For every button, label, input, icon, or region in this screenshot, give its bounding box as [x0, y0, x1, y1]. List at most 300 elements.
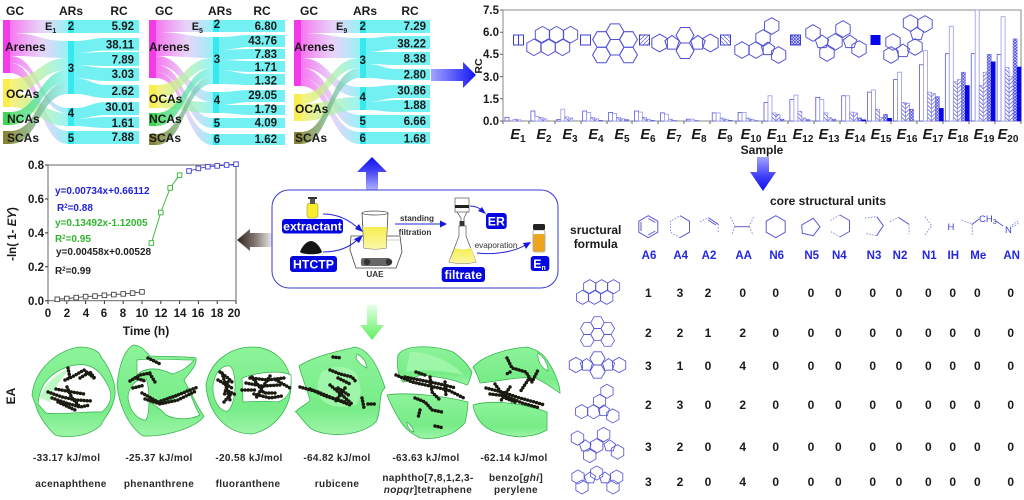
- label: En: n: [541, 265, 546, 272]
- x axis sample labels: E: [871, 127, 880, 143]
- unit names: A4: [673, 250, 689, 262]
- energies and compound names: perylene: [494, 485, 538, 496]
- x axis sample labels: E: [897, 127, 906, 143]
- rows E9: [366, 20, 430, 144]
- row 3 values: 3: [645, 359, 652, 373]
- labels E5: Arenes: [149, 40, 190, 54]
- y axis labels: 4.5: [483, 49, 500, 61]
- flows E9: [301, 20, 360, 144]
- labels E5: 43.76: [248, 36, 277, 48]
- x axis sample labels: E: [510, 127, 520, 143]
- unit names: N3: [867, 250, 881, 262]
- x axis sample labels: E: [948, 127, 957, 143]
- energies and compound names: -33.17 kJ/mol: [33, 453, 100, 464]
- row 5 values: 0: [772, 440, 779, 454]
- x axis sample labels: E: [536, 127, 546, 143]
- molecule: [218, 372, 236, 402]
- energies and compound names: benzo[ghi]: [489, 473, 543, 484]
- labels E1: OCAs: [6, 87, 40, 101]
- x axis sample labels: E: [640, 127, 650, 143]
- x axis sample labels: E: [819, 127, 828, 143]
- fit equations: =0.95: [66, 234, 91, 245]
- row 2 values: 2: [739, 326, 746, 340]
- energies and compound names: -20.58 kJ/mol: [215, 453, 283, 464]
- sankey panel: E1: [3, 4, 139, 145]
- row 5 values: 0: [974, 440, 981, 454]
- labels E1: 7.88: [112, 132, 135, 144]
- row 1 values: 0: [974, 286, 981, 300]
- label: HTCTP: HTCTP: [293, 258, 334, 272]
- row 2 values: 0: [772, 326, 779, 340]
- axis titles: [7, 207, 169, 338]
- row 4 values: 0: [705, 398, 712, 412]
- labels E5: 6: [214, 134, 220, 146]
- icon: HTCTP powder: [300, 241, 322, 254]
- x axis sample labels: 9: [727, 134, 733, 145]
- molecule: [300, 357, 375, 408]
- labels E1: 2: [68, 21, 74, 33]
- axis titles: Time (h): [123, 324, 169, 338]
- line chart: kinetics: [7, 160, 240, 338]
- row 2 values: 0: [925, 326, 932, 340]
- x axis sample labels: 6: [650, 134, 656, 145]
- row 3 values: 4: [739, 359, 746, 373]
- nodes E5: [213, 20, 219, 145]
- row 2 values: 0: [1007, 326, 1014, 340]
- labels E5: 1.71: [255, 62, 278, 74]
- x axis labels: 14: [174, 308, 187, 320]
- labels E9: 5: [359, 116, 366, 128]
- x axis labels: 20: [228, 308, 240, 320]
- x axis labels: 16: [192, 308, 204, 320]
- flows E5: [156, 20, 213, 145]
- energies and compound names: fluoranthene: [216, 479, 280, 490]
- labels E1: Arenes: [5, 40, 46, 54]
- fit equations: y=0.13492x-1.12005: [55, 218, 148, 229]
- row 1 values: 0: [925, 286, 932, 300]
- row 1 values: 0: [772, 286, 779, 300]
- row 2 values: 1: [705, 326, 712, 340]
- row 6 values: 0: [835, 475, 842, 489]
- x axis sample labels: 19: [983, 134, 995, 145]
- x axis sample labels: 15: [880, 134, 892, 145]
- row 3 values: 0: [869, 359, 876, 373]
- unit names: IH: [948, 250, 959, 262]
- molecule column: [569, 280, 626, 494]
- row 2 values: 0: [835, 326, 842, 340]
- x axis sample labels: 7: [676, 134, 682, 145]
- row 4 values: 3: [677, 398, 684, 412]
- row 5 values: 0: [869, 440, 876, 454]
- group bars E9: [294, 20, 301, 144]
- x axis sample labels: E: [614, 127, 624, 143]
- x axis sample labels: 1: [520, 134, 526, 145]
- series black: [55, 290, 144, 302]
- labels E9: E: [336, 21, 343, 33]
- x axis sample labels: 8: [701, 134, 707, 145]
- arrow: process to bar chart and sankey: [357, 157, 387, 190]
- unit icons: H: [948, 222, 954, 233]
- row 4 values: 2: [645, 398, 652, 412]
- energies and compound names: acenaphthene: [35, 479, 107, 490]
- fit equations: R: [55, 266, 62, 277]
- row 6 values: 0: [705, 475, 712, 489]
- labels E1: 3.03: [112, 69, 134, 81]
- row 5 values: 3: [645, 440, 652, 454]
- labels E1: SCAs: [7, 131, 39, 145]
- energies and compound names: rubicene: [315, 479, 359, 490]
- row 5 values: 0: [949, 440, 956, 454]
- chart frame: [45, 165, 236, 304]
- x axis sample labels: 10: [750, 134, 762, 145]
- row 2 values: 0: [949, 326, 956, 340]
- labels E1: 2.62: [112, 86, 134, 98]
- x axis sample labels: 17: [932, 134, 944, 145]
- row heading: formula: [574, 237, 618, 251]
- y axis labels: 0.0: [483, 116, 499, 128]
- labels E5: 6.80: [255, 21, 277, 33]
- labels E5: 29.05: [248, 90, 278, 102]
- cage: benzo ghi perylene: [473, 347, 560, 437]
- cage: phenanthrene: [117, 345, 204, 436]
- y axis labels: 0.2: [28, 262, 44, 274]
- x axis sample labels: 13: [828, 134, 840, 145]
- unit icons: N: [1005, 225, 1012, 236]
- icon: funnel and flask: [449, 198, 476, 264]
- unit icons: CH: [979, 214, 993, 225]
- row heading: [570, 223, 621, 251]
- row 4 values: 0: [772, 398, 779, 412]
- row 5 values: 2: [677, 440, 684, 454]
- labels E1: 3: [68, 63, 74, 75]
- labels E1: 38.11: [106, 40, 135, 52]
- fit equations: 2: [64, 204, 68, 210]
- x axis sample labels: 18: [957, 134, 969, 145]
- labels E1: 30.01: [105, 102, 135, 114]
- labels E9: 8.38: [404, 53, 427, 65]
- row 2 values: [645, 326, 1014, 340]
- row 1 values: 1: [645, 286, 652, 300]
- row 4 values: 0: [1007, 398, 1014, 412]
- labels E9: SCAs: [295, 131, 327, 145]
- labels E9: 1.68: [404, 133, 427, 145]
- labels E5: NCAs: [149, 112, 182, 126]
- x axis sample labels: E: [741, 127, 750, 143]
- x axis labels: 12: [155, 308, 167, 320]
- row 1 values: 0: [1007, 286, 1014, 300]
- labels E9: 2: [359, 21, 366, 33]
- cage: naphtho tetraphene: [387, 347, 472, 439]
- x axis sample labels: 4: [598, 134, 604, 145]
- labels E5: 1.32: [255, 76, 277, 88]
- row 4 values: 2: [739, 398, 746, 412]
- row 1 values: 0: [869, 286, 876, 300]
- label: evaporation: evaporation: [475, 241, 518, 250]
- energies and compound names: nopqr]tetraphene: [384, 485, 472, 496]
- labels E1: E: [45, 21, 52, 33]
- labels E5: 5: [199, 28, 203, 35]
- y axis labels: 0.6: [28, 194, 44, 206]
- chart frame: [500, 10, 1021, 124]
- label: En: E: [533, 257, 541, 271]
- energies and compound names: -63.63 kJ/mol: [392, 453, 460, 464]
- x axis labels: 8: [120, 308, 127, 320]
- x axis sample labels: 12: [802, 134, 814, 145]
- x axis sample labels: E: [923, 127, 932, 143]
- row 3 values: 0: [705, 359, 712, 373]
- row 4 values: 0: [869, 398, 876, 412]
- row heading: sructural: [570, 223, 621, 237]
- fit equations: y=0.00458x+0.00528: [56, 247, 152, 258]
- panel: extraction process: [272, 190, 558, 288]
- row 3 values: 0: [772, 359, 779, 373]
- cage: acenaphthene: [32, 347, 115, 437]
- row 1 values: 0: [739, 286, 746, 300]
- y axis labels: 7.5: [483, 5, 500, 17]
- legend: molecules with swatches: [514, 15, 932, 63]
- nodes E1: [68, 20, 74, 144]
- arrow: sankey to bar chart: [431, 62, 476, 88]
- fit equations: 2: [62, 267, 66, 273]
- fit equations: [55, 186, 152, 277]
- arrow: evaporation to vial: [477, 242, 531, 254]
- arrow: bar chart to table: [750, 157, 776, 191]
- x axis sample labels: 3: [572, 134, 578, 145]
- y axis title: RC: [473, 58, 485, 74]
- row 5 values: 4: [739, 440, 746, 454]
- fit equations: R: [55, 234, 62, 245]
- unit names: N2: [893, 250, 907, 262]
- y axis labels: 0.8: [28, 160, 45, 172]
- molecule: [486, 358, 545, 408]
- labels E5: 1.62: [255, 134, 277, 146]
- x axis sample labels: 11: [777, 134, 788, 145]
- row 5 values: 0: [835, 440, 842, 454]
- cage: rubicene: [295, 347, 385, 435]
- row 3 values: 0: [835, 359, 842, 373]
- row 3 values: 0: [925, 359, 932, 373]
- y axis labels: 0.4: [28, 228, 45, 240]
- x axis sample labels: E: [588, 127, 598, 143]
- row 3 values: 0: [974, 359, 981, 373]
- row 1 values: 2: [705, 286, 712, 300]
- nodes E9: [360, 20, 366, 144]
- x axis labels: 6: [101, 308, 107, 320]
- x axis labels: 18: [211, 308, 224, 320]
- labels E5: ARs: [208, 4, 232, 18]
- unit names: N6: [769, 250, 784, 262]
- labels E5: E: [192, 21, 199, 33]
- row 6 values: 0: [925, 475, 932, 489]
- table heading: core structural units: [770, 194, 886, 208]
- row 6 values: 0: [974, 475, 981, 489]
- x axis sample labels: E: [845, 127, 854, 143]
- row 6 values: 0: [772, 475, 779, 489]
- x axis sample labels: E: [793, 127, 802, 143]
- x axis sample labels: E: [562, 127, 572, 143]
- row 3 values: 0: [949, 359, 956, 373]
- row 3 values: [645, 359, 1014, 373]
- group bars E1: [3, 20, 10, 144]
- rows E5: [219, 20, 285, 145]
- row 2 values: 0: [896, 326, 903, 340]
- row 3 values: 0: [896, 359, 903, 373]
- energies and compound names: naphtho[7,8,1,2,3-: [382, 473, 474, 484]
- icon: hot plate: [350, 236, 402, 268]
- x axis labels: 0: [45, 308, 51, 320]
- unit names: N1: [922, 250, 937, 262]
- labels E9: 1.88: [404, 100, 427, 112]
- labels E9: GC: [300, 4, 318, 18]
- unit names: N4: [832, 250, 847, 262]
- unit icons: [639, 214, 1019, 238]
- labels E5: 7.83: [255, 49, 277, 61]
- x axis labels: 2: [64, 308, 70, 320]
- labels E1: [5, 4, 135, 145]
- unit names: Me: [970, 250, 986, 262]
- labels E5: 5: [214, 118, 221, 130]
- row 6 values: 0: [1007, 475, 1014, 489]
- labels E9: [294, 4, 427, 145]
- row 2 values: 0: [808, 326, 815, 340]
- arrow: process to line chart: [237, 229, 272, 251]
- row 6 values: 0: [949, 475, 956, 489]
- fit equations: R: [57, 203, 64, 214]
- row 6 values: [645, 475, 1014, 489]
- x axis sample labels: E: [998, 127, 1007, 143]
- labels E9: 2.80: [404, 69, 426, 81]
- row 2 values: 2: [645, 326, 652, 340]
- y axis labels: 6.0: [483, 27, 499, 39]
- row 6 values: 4: [739, 475, 746, 489]
- row 2 values: 0: [869, 326, 876, 340]
- y axis labels: 0.0: [28, 296, 44, 308]
- row 5 values: 0: [1007, 440, 1014, 454]
- panel border: [272, 190, 558, 288]
- labels E5: SCAs: [149, 131, 181, 145]
- x axis sample labels: E: [691, 127, 701, 143]
- row 6 values: 3: [645, 475, 652, 489]
- unit icons: 3: [993, 219, 997, 226]
- row label: EA: EA: [4, 387, 18, 404]
- row 4 values: [645, 398, 1014, 412]
- axis titles: -ln( 1- EY): [7, 207, 19, 261]
- x axis sample labels: 16: [906, 134, 918, 145]
- unit names: N5: [804, 250, 820, 262]
- energies and compound names: -64.82 kJ/mol: [303, 453, 371, 464]
- labels E9: 38.22: [397, 38, 426, 50]
- labels E1: NCAs: [7, 112, 40, 126]
- labels E5: GC: [155, 4, 173, 18]
- x axis sample labels: E: [767, 127, 777, 143]
- rows E1: [74, 20, 139, 144]
- flows E1: [10, 20, 68, 144]
- row 4 values: 0: [974, 398, 981, 412]
- row 4 values: 0: [949, 398, 956, 412]
- labels E1: 5: [68, 133, 75, 145]
- label: ER: ER: [488, 214, 505, 228]
- arrow: funnel to ER: [470, 206, 486, 214]
- x axis labels: 4: [83, 308, 90, 320]
- fit equations: y=0.00734x+0.66112: [55, 186, 150, 197]
- x axis sample labels: E: [974, 127, 983, 143]
- row 5 values: [645, 440, 1014, 454]
- bars: [505, 10, 1021, 121]
- fit equations: =0.99: [66, 266, 91, 277]
- row 5 values: 0: [896, 440, 903, 454]
- labels E9: 6: [359, 133, 366, 145]
- arrow: process to EA: [360, 305, 384, 340]
- group bars E5: [149, 20, 156, 145]
- row 6 values: 2: [677, 475, 684, 489]
- sankey panel: E9: [294, 4, 430, 145]
- molecule: [396, 372, 464, 428]
- labels E9: 4: [359, 92, 366, 104]
- labels E9: 6.66: [404, 116, 426, 128]
- sankey panel: E5: [149, 4, 285, 146]
- label: standing: standing: [400, 214, 434, 223]
- labels E5: 3: [214, 54, 220, 66]
- row 4 values: 0: [896, 398, 903, 412]
- row 1 values: 0: [896, 286, 903, 300]
- energies and compound names: -62.14 kJ/mol: [480, 453, 548, 464]
- labels E5: RC: [253, 4, 271, 18]
- x axis labels: [45, 308, 240, 320]
- labels E1: 5.92: [112, 21, 134, 33]
- arrow: standing filtration: [395, 220, 447, 228]
- labels E5: 1.79: [255, 104, 277, 116]
- x axis sample labels: E: [717, 127, 727, 143]
- labels E1: RC: [110, 4, 128, 18]
- labels E1: 1.61: [112, 118, 135, 130]
- x axis title: Sample: [741, 143, 784, 157]
- row 3 values: 0: [808, 359, 815, 373]
- molecule: [130, 358, 198, 404]
- labels E9: ARs: [353, 4, 377, 18]
- x axis sample labels: 5: [624, 134, 630, 145]
- label: filtrate: filtrate: [445, 268, 482, 282]
- labels E5: OCAs: [149, 92, 183, 106]
- row 4 values: 0: [835, 398, 842, 412]
- fit equations: 2: [62, 235, 66, 241]
- row 6 values: 0: [808, 475, 815, 489]
- arrow: powder to beaker: [323, 235, 363, 252]
- series green: [149, 173, 182, 245]
- unit names: AA: [735, 250, 752, 262]
- row 2 values: 2: [677, 326, 684, 340]
- icon: vial: [533, 224, 545, 252]
- energies and compound names: -25.37 kJ/mol: [125, 453, 193, 464]
- label: filtration: filtration: [399, 228, 431, 237]
- labels E5: 2: [214, 19, 220, 31]
- labels E1: GC: [6, 4, 24, 18]
- unit names: AN: [1003, 250, 1020, 262]
- row 5 values: 0: [925, 440, 932, 454]
- energies and compound names: phenanthrene: [124, 479, 194, 490]
- row 5 values: 0: [808, 440, 815, 454]
- labels E5: 4.09: [255, 118, 277, 130]
- row 2 values: 0: [974, 326, 981, 340]
- row 4 values: 0: [925, 398, 932, 412]
- labels E5: [149, 4, 278, 146]
- labels E9: 7.29: [404, 21, 426, 33]
- labels E1: 1: [52, 28, 56, 35]
- unit names: A2: [702, 250, 716, 262]
- energies and compound names: [33, 453, 548, 496]
- x axis sample labels: 14: [854, 134, 866, 145]
- x axis sample labels: 20: [1007, 134, 1019, 145]
- labels E5: 4: [214, 95, 221, 107]
